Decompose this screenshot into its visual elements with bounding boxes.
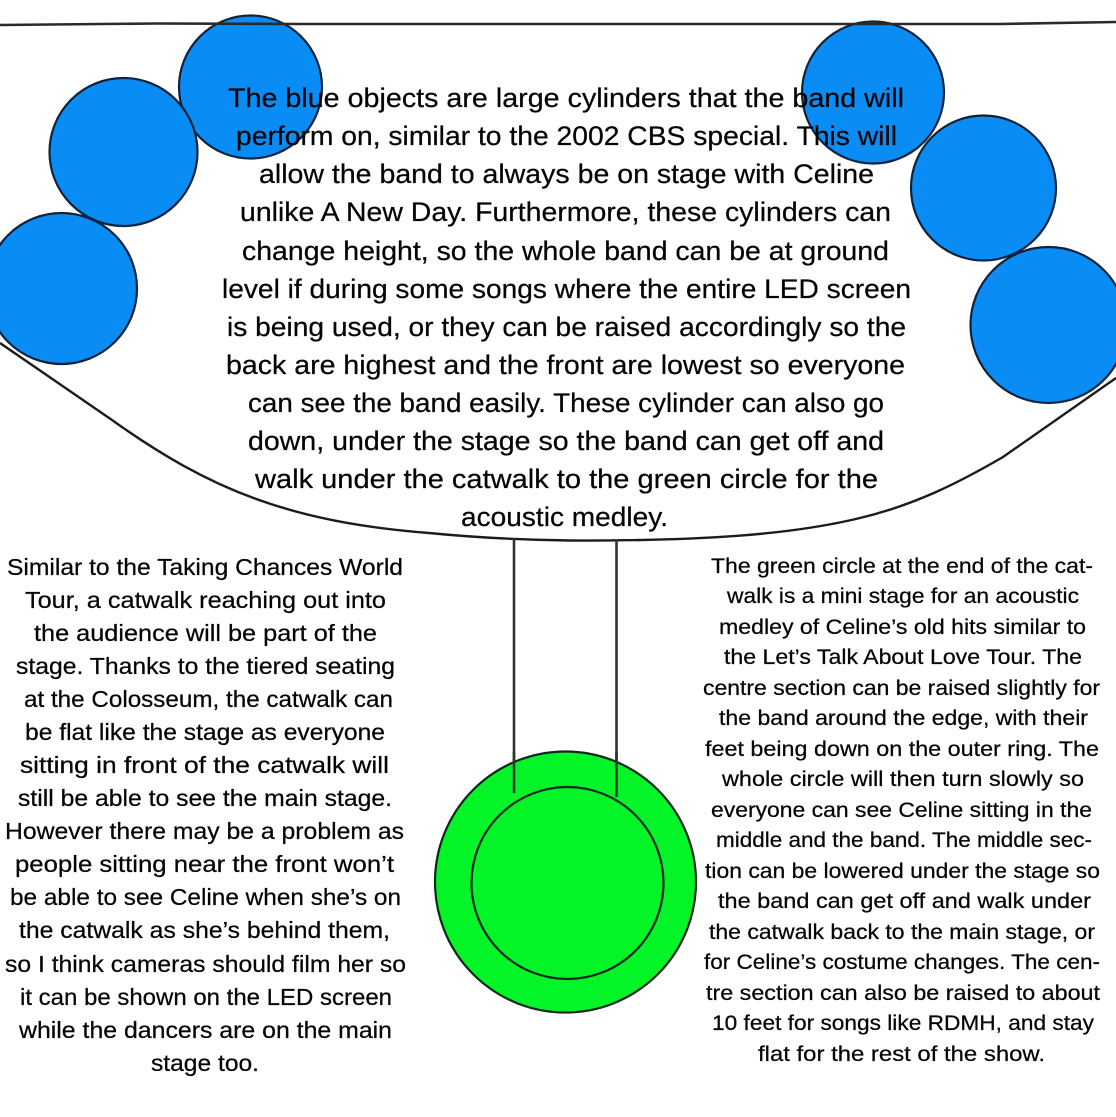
text: blue cylinders description: The blue objects are large cylinders that the band will <box>228 83 904 113</box>
text: blue cylinders description: is being used, or they can be raised accordingly so the <box>227 312 906 342</box>
text: catwalk description: the audience will be part of the <box>34 620 377 646</box>
text: catwalk description: while the dancers are on the main <box>18 1017 392 1043</box>
main stage front edge <box>0 343 1116 541</box>
text: green circle description: tre section can also be raised to about <box>706 981 1100 1005</box>
text: catwalk description: people sitting near the front won’t <box>15 851 395 877</box>
text: green circle description: the catwalk back to the main stage, or <box>709 920 1095 944</box>
text: blue cylinders description: allow the band to always be on stage with Celine <box>259 159 874 189</box>
text: catwalk description: Similar to the Taking Chances World <box>7 554 403 580</box>
catwalk <box>514 538 616 797</box>
text: catwalk description: be able to see Celine when she’s on <box>10 884 401 910</box>
text: green circle description: tion can be lowered under the stage so <box>705 859 1100 883</box>
text: catwalk description: However there may be a problem as <box>5 818 404 844</box>
text: green circle description: the band can get off and walk under <box>718 889 1091 913</box>
text: green circle description: walk is a mini stage for an acoustic <box>726 584 1079 608</box>
text: green circle description: the Let’s Talk About Love Tour. The <box>724 645 1082 669</box>
text: blue cylinders description: back are highest and the front are lowest so everyone <box>226 350 905 380</box>
text: green circle description <box>703 554 1100 1066</box>
text: green circle description: medley of Celine’s old hits similar to <box>719 615 1086 639</box>
text: green circle description: flat for the rest of the show. <box>758 1042 1045 1066</box>
text: blue cylinders description: unlike A New Day. Furthermore, these cylinders can <box>240 197 891 227</box>
text: green circle description: feet being down on the outer ring. The <box>705 737 1099 761</box>
text: green circle description: 10 feet for songs like RDMH, and stay <box>712 1011 1094 1035</box>
text: catwalk description: so I think cameras should film her so <box>5 951 406 977</box>
text: green circle description: everyone can see Celine sitting in the <box>711 798 1092 822</box>
main stage back edge <box>0 22 1116 25</box>
text: green circle description: The green circle at the end of the cat- <box>711 554 1093 578</box>
text: green circle description: the band around the edge, with their <box>719 706 1088 730</box>
text: blue cylinders description: acoustic medley. <box>461 502 668 532</box>
blue band cylinders <box>0 16 1116 403</box>
text: green circle description: for Celine’s costume changes. The cen- <box>704 950 1100 974</box>
green mini stage <box>435 752 696 1012</box>
text: catwalk description: sitting in front of the catwalk will <box>20 752 389 778</box>
text: blue cylinders description: walk under the catwalk to the green circle for the <box>254 464 878 494</box>
text: green circle description: centre section can be raised slightly for <box>703 676 1100 700</box>
text: green circle description: middle and the band. The middle sec- <box>716 828 1092 852</box>
text: catwalk description: Tour, a catwalk reaching out into <box>25 587 386 613</box>
text: blue cylinders description: down, under the stage so the band can get off and <box>248 426 884 456</box>
text: blue cylinders description <box>222 83 911 532</box>
text: catwalk description: stage too. <box>151 1050 259 1076</box>
text: catwalk description: the catwalk as she’s behind them, <box>19 917 390 943</box>
text: blue cylinders description: level if during some songs where the entire LED screen <box>222 274 911 304</box>
text: blue cylinders description: change height, so the whole band can be at ground <box>242 236 889 266</box>
text: catwalk description: be flat like the stage as everyone <box>25 719 385 745</box>
text: catwalk description: at the Colosseum, the catwalk can <box>24 686 393 712</box>
text: catwalk description: it can be shown on the LED screen <box>20 984 392 1010</box>
text: green circle description: whole circle will then turn slowly so <box>721 767 1084 791</box>
text: blue cylinders description: can see the band easily. These cylinder can also go <box>248 388 884 418</box>
text: catwalk description <box>5 554 406 1076</box>
text: catwalk description: still be able to see the main stage. <box>18 785 392 811</box>
text: catwalk description: stage. Thanks to the tiered seating <box>16 653 395 679</box>
text: blue cylinders description: perform on, similar to the 2002 CBS special. This will <box>236 121 897 151</box>
